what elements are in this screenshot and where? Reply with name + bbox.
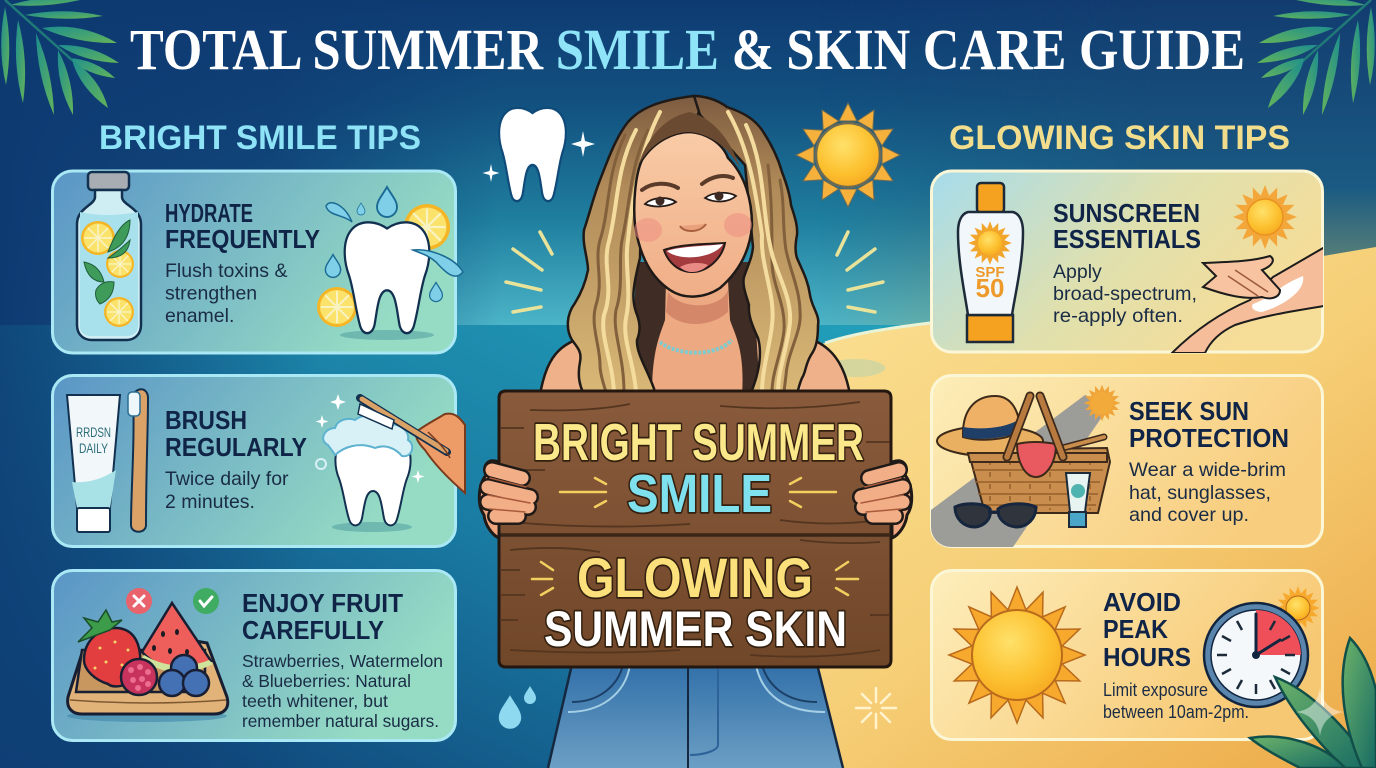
icon: toothpaste tube — [67, 395, 120, 532]
icon: small sun behind clock — [1276, 586, 1320, 630]
icon: hand applying sunscreen on arm — [1172, 244, 1330, 353]
heading: HYDRATE — [165, 198, 253, 228]
card — [932, 171, 1322, 352]
right hand — [861, 461, 912, 538]
cheeks — [634, 213, 752, 242]
heading: ENJOY FRUIT — [242, 588, 403, 618]
body text: 2 minutes. — [165, 491, 255, 513]
panel: enjoy fruit carefully — [52, 570, 456, 740]
wood grain — [500, 402, 890, 657]
hair darker strands — [594, 130, 800, 392]
sign text: smile: SMILE — [627, 464, 772, 524]
jeans — [548, 660, 843, 768]
icon: SPF 50 sunscreen bottle: 50 — [976, 273, 1004, 303]
shadow cast by sun — [931, 395, 1110, 547]
icon: SPF 50 sunscreen bottle: SPF — [975, 264, 1005, 281]
panel: seek sun protection: PROTECTION — [1129, 423, 1289, 453]
face — [634, 132, 752, 297]
shoulders — [540, 330, 850, 395]
top strap — [792, 345, 804, 392]
panel: enjoy fruit carefully: CAREFULLY — [242, 615, 384, 645]
body text: Wear a wide-brim — [1129, 459, 1286, 481]
icon: sun — [1233, 185, 1297, 249]
heading: SEEK SUN — [1129, 396, 1249, 426]
panel: hydrate frequently — [52, 171, 463, 353]
panel: sunscreen essentials — [932, 171, 1330, 353]
palm leaves: top right — [1257, 0, 1375, 115]
panel: avoid peak hours: HOURS — [1103, 642, 1191, 672]
icon: water bottle with lemon — [77, 172, 141, 340]
icon: toothpaste tube: DAILY — [79, 440, 108, 456]
icon: tooth with water and lemon — [317, 187, 463, 340]
body text: Twice daily for — [165, 468, 289, 490]
sign board — [499, 391, 891, 667]
body text: and cover up. — [1129, 504, 1249, 526]
sign text: bright summer: BRIGHT SUMMER — [533, 414, 864, 472]
dark under hair — [632, 262, 760, 395]
card — [932, 376, 1322, 546]
panel: brush regularly — [52, 376, 465, 546]
icon: sparkling tooth — [482, 108, 595, 201]
body text: hat, sunglasses, — [1129, 482, 1271, 504]
icon: small sun — [1084, 385, 1120, 421]
body text: Apply — [1053, 261, 1102, 283]
body text: re-apply often. — [1053, 305, 1183, 327]
panel: brush regularly: REGULARLY — [165, 432, 307, 462]
body text: teeth whitener, but — [242, 691, 388, 711]
body text: Strawberries, Watermelon — [242, 651, 443, 671]
hair highlights — [603, 112, 790, 392]
icon: corner sparkle — [1296, 688, 1344, 736]
heading: BRUSH — [165, 405, 247, 435]
eyes — [645, 192, 736, 206]
icon: white sparkle burst — [856, 688, 896, 728]
body text: broad-spectrum, — [1053, 283, 1197, 305]
panel: avoid peak hours: PEAK — [1103, 614, 1168, 644]
body text: Flush toxins & — [165, 260, 287, 282]
card — [52, 171, 456, 353]
eyebrows — [642, 176, 733, 190]
body text: between 10am-2pm. — [1103, 702, 1249, 722]
panel: sunscreen essentials: ESSENTIALS — [1053, 224, 1201, 254]
icon: red cross badge — [126, 588, 152, 614]
icon: fruit tray — [67, 603, 228, 722]
card — [932, 570, 1322, 740]
icon: SPF 50 sunscreen bottle — [958, 183, 1023, 342]
body text: Limit exposure — [1103, 680, 1208, 700]
heading: glowing skin tips: GLOWING SKIN TIPS — [949, 119, 1290, 157]
icon: basket with hat, sunglasses and tube — [937, 396, 1110, 527]
heading: SUNSCREEN — [1053, 198, 1200, 228]
icon: large sun top — [796, 103, 900, 207]
parting shadow — [638, 112, 740, 168]
palm leaves: top left — [1, 0, 119, 115]
icon: large sun — [949, 587, 1085, 723]
palm leaves: bottom right — [1250, 638, 1376, 768]
body text: enamel. — [165, 305, 234, 327]
hair right — [694, 96, 818, 395]
plank seam — [499, 533, 891, 537]
title: TOTAL SUMMER SMILE & SKIN CARE GUIDE — [130, 17, 1245, 82]
sign sparkles — [532, 478, 858, 595]
sign text: summer skin: SUMMER SKIN — [544, 601, 847, 657]
card — [52, 570, 456, 740]
card — [52, 376, 456, 546]
body text: remember natural sugars. — [242, 711, 439, 731]
left hand — [479, 461, 530, 538]
heading: bright smile tips: BRIGHT SMILE TIPS — [99, 119, 421, 157]
icon: toothpaste tube: RRDSN — [76, 424, 111, 440]
panel: seek sun protection — [931, 376, 1322, 547]
neck and chest — [652, 280, 743, 395]
sign text: glowing: GLOWING — [577, 546, 813, 609]
necklace — [660, 340, 732, 353]
icon: tooth being brushed with foam — [316, 394, 465, 532]
nose — [680, 224, 706, 231]
glow rays beside the woman — [506, 232, 883, 312]
heading: AVOID — [1103, 587, 1181, 617]
woman — [540, 96, 850, 768]
icon: clock marking peak hours — [1204, 603, 1308, 707]
icon: toothbrush — [128, 389, 148, 532]
smile — [664, 243, 725, 272]
panel: avoid peak hours — [932, 570, 1322, 740]
icon: green check badge — [193, 588, 219, 614]
body text: strengthen — [165, 282, 257, 304]
icon: water drops — [499, 686, 536, 729]
panel: hydrate frequently: FREQUENTLY — [165, 224, 320, 254]
wooden sign — [499, 391, 891, 667]
body text: & Blueberries: Natural — [242, 671, 411, 691]
hair left — [568, 96, 700, 395]
